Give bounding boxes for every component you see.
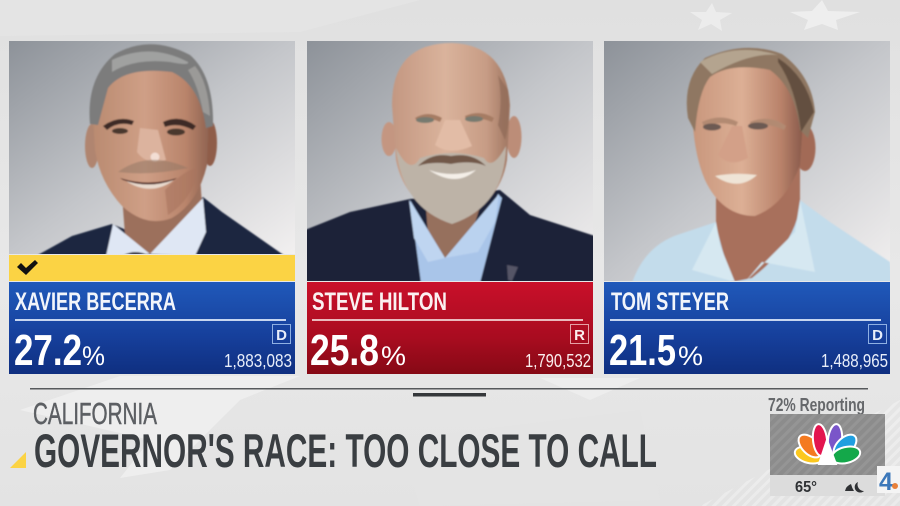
result box: Becerra: 1,883,083 bbox=[224, 351, 292, 371]
result box: Hilton: STEVE HILTON bbox=[312, 288, 447, 316]
portrait: Steve Hilton bbox=[305, 41, 595, 283]
result box: Becerra bbox=[9, 282, 295, 375]
result box: Becerra: D bbox=[276, 327, 287, 344]
icon: yellow corner triangle bbox=[10, 452, 26, 468]
icon: peacock bbox=[793, 423, 862, 466]
result box: Becerra: 27.2 bbox=[14, 326, 82, 375]
station logo bbox=[877, 466, 900, 496]
portrait: Tom Steyer bbox=[604, 41, 892, 283]
result box: Hilton: R bbox=[574, 327, 585, 344]
result box: Steyer bbox=[604, 282, 890, 375]
result box: Hilton bbox=[307, 282, 593, 375]
result box: Becerra: % bbox=[82, 341, 105, 371]
panel: Xavier Becerra bbox=[9, 41, 295, 375]
heading: California: CALIFORNIA bbox=[33, 396, 157, 431]
portrait: Xavier Becerra bbox=[9, 41, 295, 256]
result box: Steyer: D bbox=[872, 327, 883, 344]
winner bar with checkmark bbox=[9, 255, 295, 281]
result box: Steyer: 21.5 bbox=[609, 326, 676, 375]
reporting label: 72% Reporting bbox=[768, 395, 865, 415]
network logo tile bbox=[770, 414, 885, 475]
panel: Tom Steyer bbox=[604, 41, 892, 375]
weather strip: 65° bbox=[795, 479, 817, 496]
result box: Steyer: % bbox=[678, 341, 703, 371]
divider rule bbox=[30, 388, 868, 396]
weather strip bbox=[770, 475, 885, 496]
icon: moon and cloud bbox=[845, 482, 864, 493]
result box: Steyer: TOM STEYER bbox=[611, 288, 729, 316]
panel: Steve Hilton bbox=[305, 41, 595, 375]
result box: Steyer: 1,488,965 bbox=[821, 351, 888, 371]
result box: Hilton: 25.8 bbox=[310, 326, 379, 375]
result box: Becerra: XAVIER BECERRA bbox=[15, 288, 176, 316]
result box: Hilton: % bbox=[381, 341, 406, 371]
station logo: 4 bbox=[879, 468, 893, 496]
result box: Hilton: 1,790,532 bbox=[525, 351, 591, 371]
